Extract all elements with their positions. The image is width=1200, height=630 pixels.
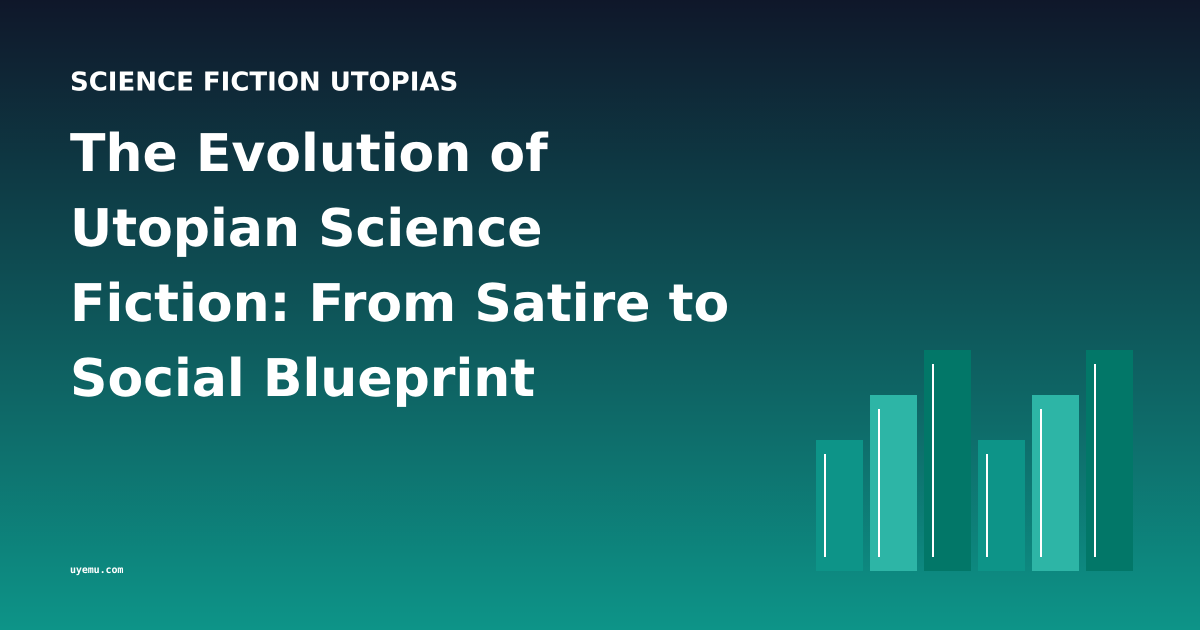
title	[70, 124, 729, 409]
footer domain text: uyemu.com	[70, 565, 123, 576]
bar chart illustration	[816, 350, 1133, 571]
title: Fiction: From Satire to	[70, 274, 729, 334]
title: The Evolution of	[70, 124, 548, 184]
bar 2	[870, 395, 917, 571]
bar 4	[978, 440, 1025, 571]
title: Utopian Science	[70, 199, 543, 259]
bar 3	[924, 350, 971, 571]
bar 6	[1086, 350, 1133, 571]
subtitle: SCIENCE FICTION UTOPIAS	[70, 68, 458, 98]
bar 5	[1032, 395, 1079, 571]
bar 1	[816, 440, 863, 571]
title: Social Blueprint	[70, 349, 535, 409]
